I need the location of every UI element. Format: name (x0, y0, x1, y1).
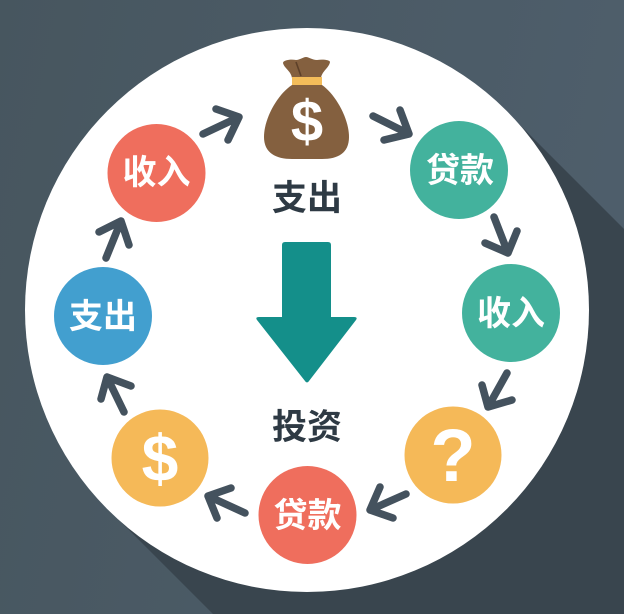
arrow: bag to loan (373, 110, 409, 140)
node: question mark yellow (404, 406, 502, 504)
heading: 支出: 支出 (272, 179, 342, 218)
arrow: loan to income (485, 217, 517, 253)
icon: money bag: $ (291, 89, 323, 154)
node: 贷款 green (410, 121, 508, 219)
arrow: expense to income (99, 221, 129, 258)
icon: money bag (264, 57, 349, 159)
arrow: income to question (482, 373, 512, 407)
node: 贷款 red: 贷款 (274, 497, 342, 535)
node: question mark yellow: ? (430, 414, 476, 497)
node: dollar yellow (112, 410, 208, 506)
node: 支出 blue (54, 267, 152, 365)
node: dollar yellow: $ (142, 421, 178, 495)
heading: 投资: 投资 (272, 408, 342, 447)
node: 贷款 red (258, 466, 356, 564)
node: 贷款 green: 贷款 (426, 152, 494, 190)
arrow: income to bag (203, 109, 239, 140)
arrow: loan to dollar (208, 488, 245, 518)
arrow: central down arrow (256, 242, 357, 382)
arrow: dollar to expense (101, 377, 131, 412)
node: 收入 green: 收入 (477, 295, 545, 333)
arrow: question to loan (370, 487, 406, 518)
node: 收入 red (108, 124, 206, 222)
long shadow of circle (108, 111, 624, 614)
node: 收入 red: 收入 (122, 154, 190, 192)
node: 收入 green (462, 264, 560, 362)
node: 支出 blue: 支出 (69, 298, 137, 336)
